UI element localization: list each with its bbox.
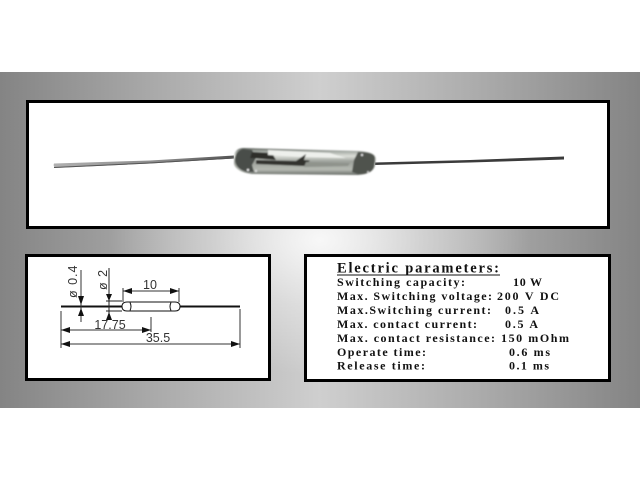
- dimension: wire diameter 0.4: ø 0.4: [66, 264, 80, 298]
- parameter: switching current: Max.Switching current:: [337, 303, 491, 317]
- panel: electric parameters: [306, 256, 610, 380]
- dimension: length 10: [123, 278, 179, 302]
- parameter: operate time: [337, 345, 550, 359]
- parameter: contact resistance: 150 mOhm: [501, 331, 569, 345]
- parameter: contact resistance: [337, 331, 569, 345]
- panel: reed switch photo: [28, 102, 608, 228]
- dimension: length 10: 10: [143, 278, 157, 292]
- parameter: contact resistance: Max. contact resistance:: [337, 331, 495, 345]
- parameter: switching voltage: [337, 289, 559, 303]
- glass capsule: [234, 148, 376, 175]
- parameter: switching voltage: 200 V DC: [497, 289, 559, 303]
- parameter: release time: 0.1 ms: [509, 358, 549, 372]
- parameter: switching capacity: 10 W: [513, 275, 542, 289]
- dimension: length 35.5: [61, 309, 240, 348]
- parameter: switching current: 0.5 A: [505, 303, 539, 317]
- parameter: switching capacity: Switching capacity:: [337, 275, 465, 289]
- grey gradient background band: [0, 72, 640, 408]
- left wire: [54, 156, 234, 168]
- dimension: length 17.75: [61, 317, 151, 333]
- wire and capsule outline: [61, 302, 240, 311]
- panel: dimension drawing: [26, 256, 270, 380]
- right wire: [375, 156, 564, 165]
- dimension: body diameter 2: ø 2: [96, 269, 110, 290]
- dimension: length 17.75: 17.75: [94, 318, 126, 332]
- parameter: operate time: Operate time:: [337, 345, 426, 359]
- parameter: contact current: [337, 317, 538, 331]
- parameter: contact current: Max. contact current:: [337, 317, 477, 331]
- parameter: switching voltage: Max. Switching voltage:: [337, 289, 492, 303]
- parameter: release time: Release time:: [337, 358, 425, 372]
- parameter: release time: [337, 358, 549, 372]
- parameter: operate time: 0.6 ms: [509, 345, 550, 359]
- dimension: wire diameter 0.4: [66, 264, 84, 322]
- dimension: length 35.5: 35.5: [146, 331, 170, 345]
- parameter: contact current: 0.5 A: [505, 317, 538, 331]
- dimension: body diameter 2: [96, 268, 122, 320]
- heading: Electric parameters:: [337, 260, 499, 276]
- parameter: switching capacity: [337, 275, 542, 289]
